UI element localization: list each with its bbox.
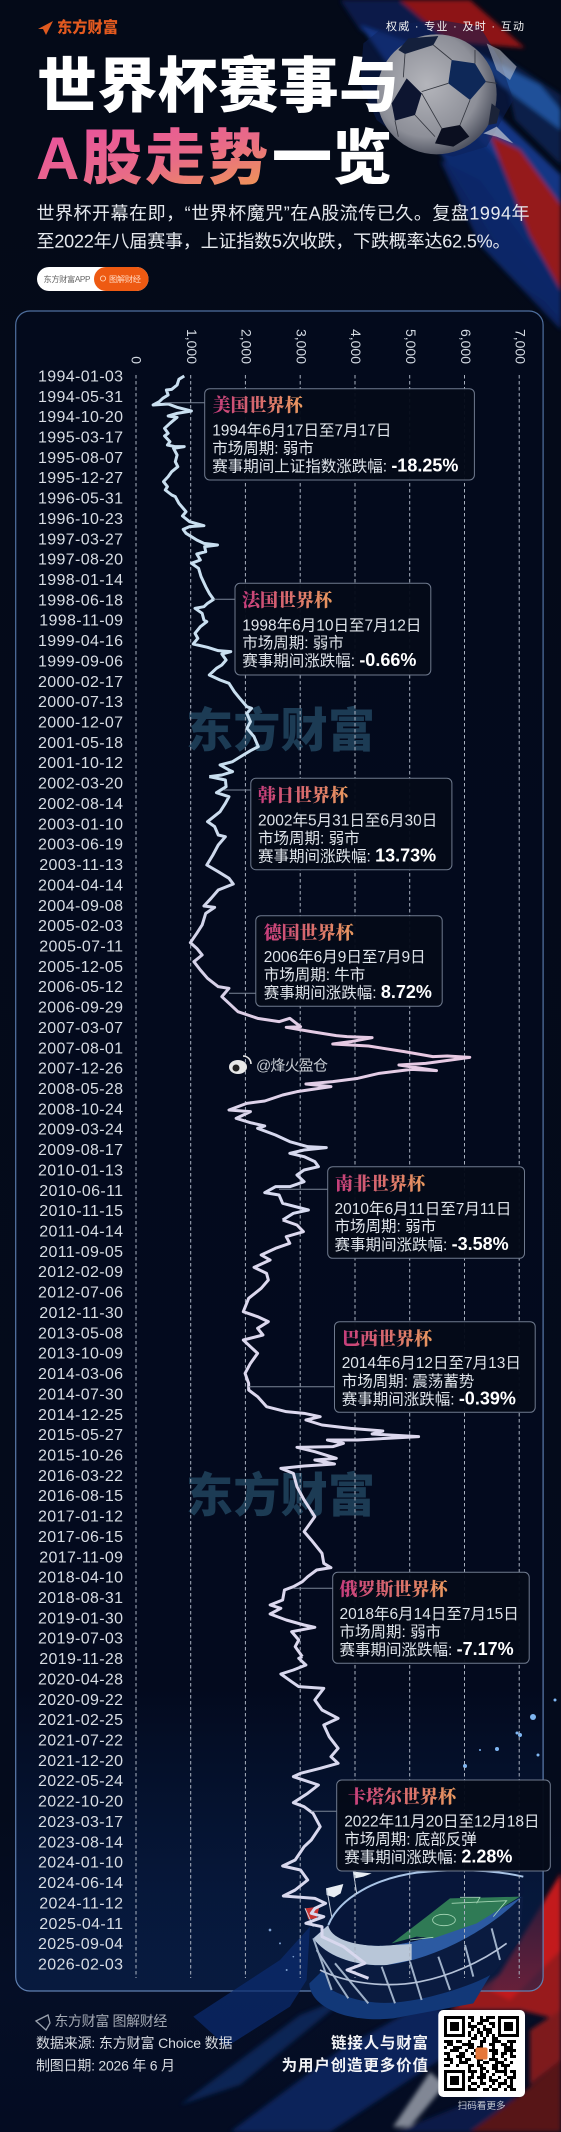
QR code: 扫码看更多	[458, 2100, 506, 2112]
date axis labels: 1998-01-14	[38, 572, 123, 589]
callout: Qatar 2022: 2022年11月20日至12月18日	[344, 1812, 539, 1830]
date axis labels: 2004-09-08	[38, 898, 123, 915]
footer: source and date: 东方财富 图解财经	[54, 2013, 167, 2029]
value axis labels: 5,000	[403, 329, 419, 364]
callout: Qatar 2022: 赛事期间涨跌幅: 2.28%	[344, 1846, 512, 1866]
date axis labels: 2022-05-24	[38, 1773, 123, 1790]
date axis labels: 2015-10-26	[38, 1448, 123, 1464]
date axis labels: 2010-11-15	[39, 1203, 123, 1220]
weibo attribution	[229, 1056, 328, 1074]
date axis labels: 2019-07-03	[38, 1631, 123, 1648]
date axis labels: 2003-11-13	[39, 857, 123, 874]
date axis labels: 2012-07-06	[38, 1285, 123, 1302]
callout: Brazil 2014: 2014年6月12日至7月13日	[342, 1354, 521, 1372]
callout: USA 1994: 美国世界杯	[213, 392, 305, 418]
footer: slogan	[282, 2033, 428, 2074]
QR code	[438, 2010, 525, 2112]
value axis labels	[128, 329, 528, 364]
value axis labels: 0	[128, 356, 144, 364]
date axis labels: 2019-01-30	[38, 1610, 123, 1627]
callout: Russia 2018: 俄罗斯世界杯	[340, 1576, 449, 1602]
date axis labels: 1994-01-03	[38, 368, 123, 385]
date axis labels: 1997-03-27	[38, 531, 123, 548]
date axis labels: 1995-12-27	[38, 470, 123, 487]
date axis labels: 2016-03-22	[38, 1468, 123, 1485]
date axis labels: 2026-02-03	[38, 1956, 123, 1974]
tagline: 权威 · 专业 · 及时 · 互动	[386, 19, 524, 33]
date axis labels: 1998-11-09	[39, 613, 123, 630]
date axis labels: 2017-06-15	[38, 1529, 123, 1546]
stadium illustration	[193, 1870, 524, 2047]
date axis labels: 2002-08-14	[38, 796, 123, 813]
date axis labels: 2010-01-13	[38, 1162, 123, 1179]
search pill badge: 东方财富APP	[44, 274, 91, 284]
date axis labels: 2021-12-20	[38, 1753, 123, 1770]
date axis labels: 2024-01-10	[38, 1855, 123, 1872]
callout: Germany 2006: 德国世界杯	[264, 919, 356, 945]
date axis labels: 2009-03-24	[38, 1122, 123, 1139]
callout: South Africa 2010: 市场周期: 弱市	[334, 1218, 436, 1236]
date axis labels: 2024-11-12	[39, 1895, 123, 1912]
date axis labels: 2023-08-14	[38, 1834, 123, 1851]
callout: France 1998: 法国世界杯	[242, 586, 334, 612]
callout: Korea-Japan 2002: 韩日世界杯	[258, 782, 350, 808]
callout: France 1998: 赛事期间涨跌幅: -0.66%	[242, 650, 416, 670]
value axis labels: 7,000	[512, 329, 528, 364]
date axis labels: 2012-11-30	[39, 1305, 123, 1322]
date axis labels: 2005-07-11	[39, 938, 123, 956]
search pill badge	[37, 267, 148, 291]
date axis labels: 2022-10-20	[38, 1794, 123, 1811]
weibo attribution: @烽火盈仓	[256, 1058, 328, 1074]
date axis labels: 2005-02-03	[38, 918, 123, 935]
date axis labels: 2025-04-11	[39, 1916, 123, 1933]
callout: Korea-Japan 2002: 赛事期间涨跌幅: 13.73%	[258, 846, 436, 866]
callout: Brazil 2014: 巴西世界杯	[342, 1325, 434, 1351]
callout: South Africa 2010: 赛事期间涨跌幅: -3.58%	[334, 1234, 509, 1254]
date axis labels: 2001-05-18	[38, 735, 123, 752]
date axis labels: 2001-10-12	[38, 755, 123, 772]
callout: South Africa 2010: 南非世界杯	[335, 1170, 427, 1196]
date axis labels: 2006-09-29	[38, 1000, 123, 1017]
date axis labels: 2008-10-24	[38, 1101, 123, 1118]
brand logo: 东方财富	[57, 18, 118, 36]
callout: USA 1994	[165, 389, 474, 480]
date axis labels: 2005-12-05	[38, 959, 123, 976]
date axis labels: 2000-07-13	[38, 694, 123, 711]
callout: Brazil 2014	[249, 1322, 535, 1412]
callout: USA 1994: 市场周期: 弱市	[212, 440, 314, 458]
date axis labels: 2006-05-12	[38, 979, 123, 996]
date axis labels: 1997-08-20	[38, 552, 123, 569]
date axis labels: 1998-06-18	[38, 592, 123, 609]
date axis labels: 2014-12-25	[38, 1407, 123, 1424]
intro text: 至2022年八届赛事，上证指数5次收跌，下跌概率达62.5%。	[36, 232, 510, 252]
value axis labels: 3,000	[294, 329, 310, 364]
date axis labels: 2017-01-12	[38, 1509, 123, 1526]
panel: chart frame	[16, 311, 543, 1991]
callout: Germany 2006: 赛事期间涨跌幅: 8.72%	[264, 982, 432, 1002]
grid lines	[136, 375, 519, 1978]
date axis labels: 1995-03-17	[38, 430, 123, 446]
date axis labels: 2020-04-28	[38, 1671, 123, 1688]
date axis labels: 2011-09-05	[39, 1244, 123, 1261]
date axis labels: 2004-04-14	[38, 877, 123, 894]
callout: USA 1994: 1994年6月17日至7月17日	[212, 422, 391, 440]
date axis labels: 2019-11-28	[39, 1651, 123, 1668]
date axis labels: 2007-03-07	[38, 1020, 123, 1037]
callout: Russia 2018: 市场周期: 弱市	[340, 1623, 441, 1641]
line chart: Shanghai Composite Index	[153, 376, 470, 1978]
date axis labels: 2009-08-17	[38, 1142, 123, 1159]
date axis labels: 2018-08-31	[38, 1590, 123, 1607]
date axis labels: 2014-03-06	[38, 1366, 123, 1383]
callout: Russia 2018: 2018年6月14日至7月15日	[340, 1605, 519, 1623]
date axis labels: 2003-06-19	[38, 837, 123, 854]
callout: South Africa 2010: 2010年6月11日至7月11日	[334, 1200, 511, 1218]
value axis labels: 2,000	[239, 329, 255, 364]
callout: Russia 2018	[293, 1572, 529, 1663]
watermark: bottom: 东方财富	[186, 1469, 375, 1522]
callout: France 1998: 1998年6月10日至7月12日	[242, 616, 421, 634]
watermark: top: 东方财富	[186, 704, 375, 757]
date axis labels: 2008-05-28	[38, 1081, 123, 1098]
icon: soccer ball	[360, 20, 517, 157]
footer: slogan: 为用户创造更多价值	[282, 2056, 428, 2074]
intro text	[36, 204, 530, 252]
callout: USA 1994: 赛事期间上证指数涨跌幅: -18.25%	[212, 456, 458, 476]
date axis labels: 2020-09-22	[38, 1692, 123, 1709]
date axis labels: 2000-02-17	[38, 674, 123, 691]
date axis labels: 1996-05-31	[38, 491, 123, 508]
callout: Germany 2006	[229, 916, 442, 1006]
date axis labels: 2000-12-07	[38, 714, 123, 732]
date axis labels: 2011-04-14	[39, 1224, 123, 1240]
callout: Qatar 2022: 市场周期: 底部反弹	[344, 1830, 477, 1848]
date axis labels: 2003-01-10	[38, 816, 123, 833]
callout: Germany 2006: 2006年6月9日至7月9日	[264, 948, 426, 966]
stadium stars	[463, 1698, 556, 1768]
callout: France 1998: 市场周期: 弱市	[242, 634, 344, 652]
callout: Qatar 2022	[311, 1780, 550, 1871]
date axis labels: 2013-10-09	[38, 1346, 123, 1363]
callout: Korea-Japan 2002	[224, 778, 452, 870]
callout: Qatar 2022: 卡塔尔世界杯	[348, 1783, 458, 1809]
date axis labels: 2007-08-01	[38, 1040, 123, 1057]
callout: Russia 2018: 赛事期间涨跌幅: -7.17%	[340, 1639, 514, 1659]
date axis labels: 2007-12-26	[38, 1061, 123, 1078]
date axis labels: 2021-02-25	[38, 1712, 123, 1729]
title: A股走势	[36, 125, 268, 192]
footer: source and date	[36, 2013, 232, 2074]
date axis labels: 1999-09-06	[38, 653, 123, 670]
date axis labels: 2023-03-17	[38, 1814, 123, 1831]
date axis labels: 2014-07-30	[38, 1386, 123, 1403]
date axis labels: 1995-08-07	[38, 450, 123, 467]
value axis labels: 4,000	[348, 329, 364, 364]
date axis labels: 2002-03-20	[38, 776, 123, 793]
date axis labels: 1994-10-20	[38, 409, 123, 426]
date axis labels: 2016-08-15	[38, 1488, 123, 1505]
callout: Germany 2006: 市场周期: 牛市	[264, 966, 365, 984]
value axis labels: 6,000	[458, 329, 474, 364]
date axis labels: 2018-04-10	[38, 1570, 123, 1587]
search pill badge: 图解财经	[109, 274, 141, 284]
date axis labels: 2024-06-14	[38, 1875, 123, 1892]
callout: France 1998	[214, 583, 431, 675]
value axis labels: 1,000	[184, 329, 200, 364]
title: 一览	[272, 125, 392, 192]
date axis labels: 1994-05-31	[38, 389, 123, 406]
date axis labels: 1996-10-23	[38, 511, 123, 528]
callout: Brazil 2014: 市场周期: 震荡蓄势	[342, 1372, 474, 1390]
date axis labels: 2021-07-22	[38, 1732, 123, 1750]
footer: source and date: 数据来源: 东方财富 Choice 数据	[36, 2035, 232, 2051]
title: 世界杯赛事与	[37, 53, 399, 120]
callout: Korea-Japan 2002: 市场周期: 弱市	[258, 830, 360, 848]
date axis labels: 2013-05-08	[38, 1325, 123, 1342]
date axis labels: 2025-09-04	[38, 1936, 123, 1953]
callout: South Africa 2010	[279, 1167, 524, 1258]
callout: Korea-Japan 2002: 2002年5月31日至6月30日	[258, 812, 437, 830]
title	[36, 53, 399, 192]
date axis labels: 2017-11-09	[39, 1549, 123, 1566]
intro text: 世界杯开幕在即，“世界杯魔咒”在A股流传已久。复盘1994年	[36, 204, 530, 224]
footer: source and date: 制图日期: 2026 年 6 月	[36, 2058, 175, 2074]
date axis labels: 2010-06-11	[39, 1183, 123, 1200]
date axis labels: 1999-04-16	[38, 633, 123, 650]
date axis labels: 2015-05-27	[38, 1427, 123, 1444]
callout: Brazil 2014: 赛事期间涨跌幅: -0.39%	[342, 1388, 516, 1408]
date axis labels: 2012-02-09	[38, 1264, 123, 1281]
footer: slogan: 链接人与财富	[331, 2033, 428, 2052]
